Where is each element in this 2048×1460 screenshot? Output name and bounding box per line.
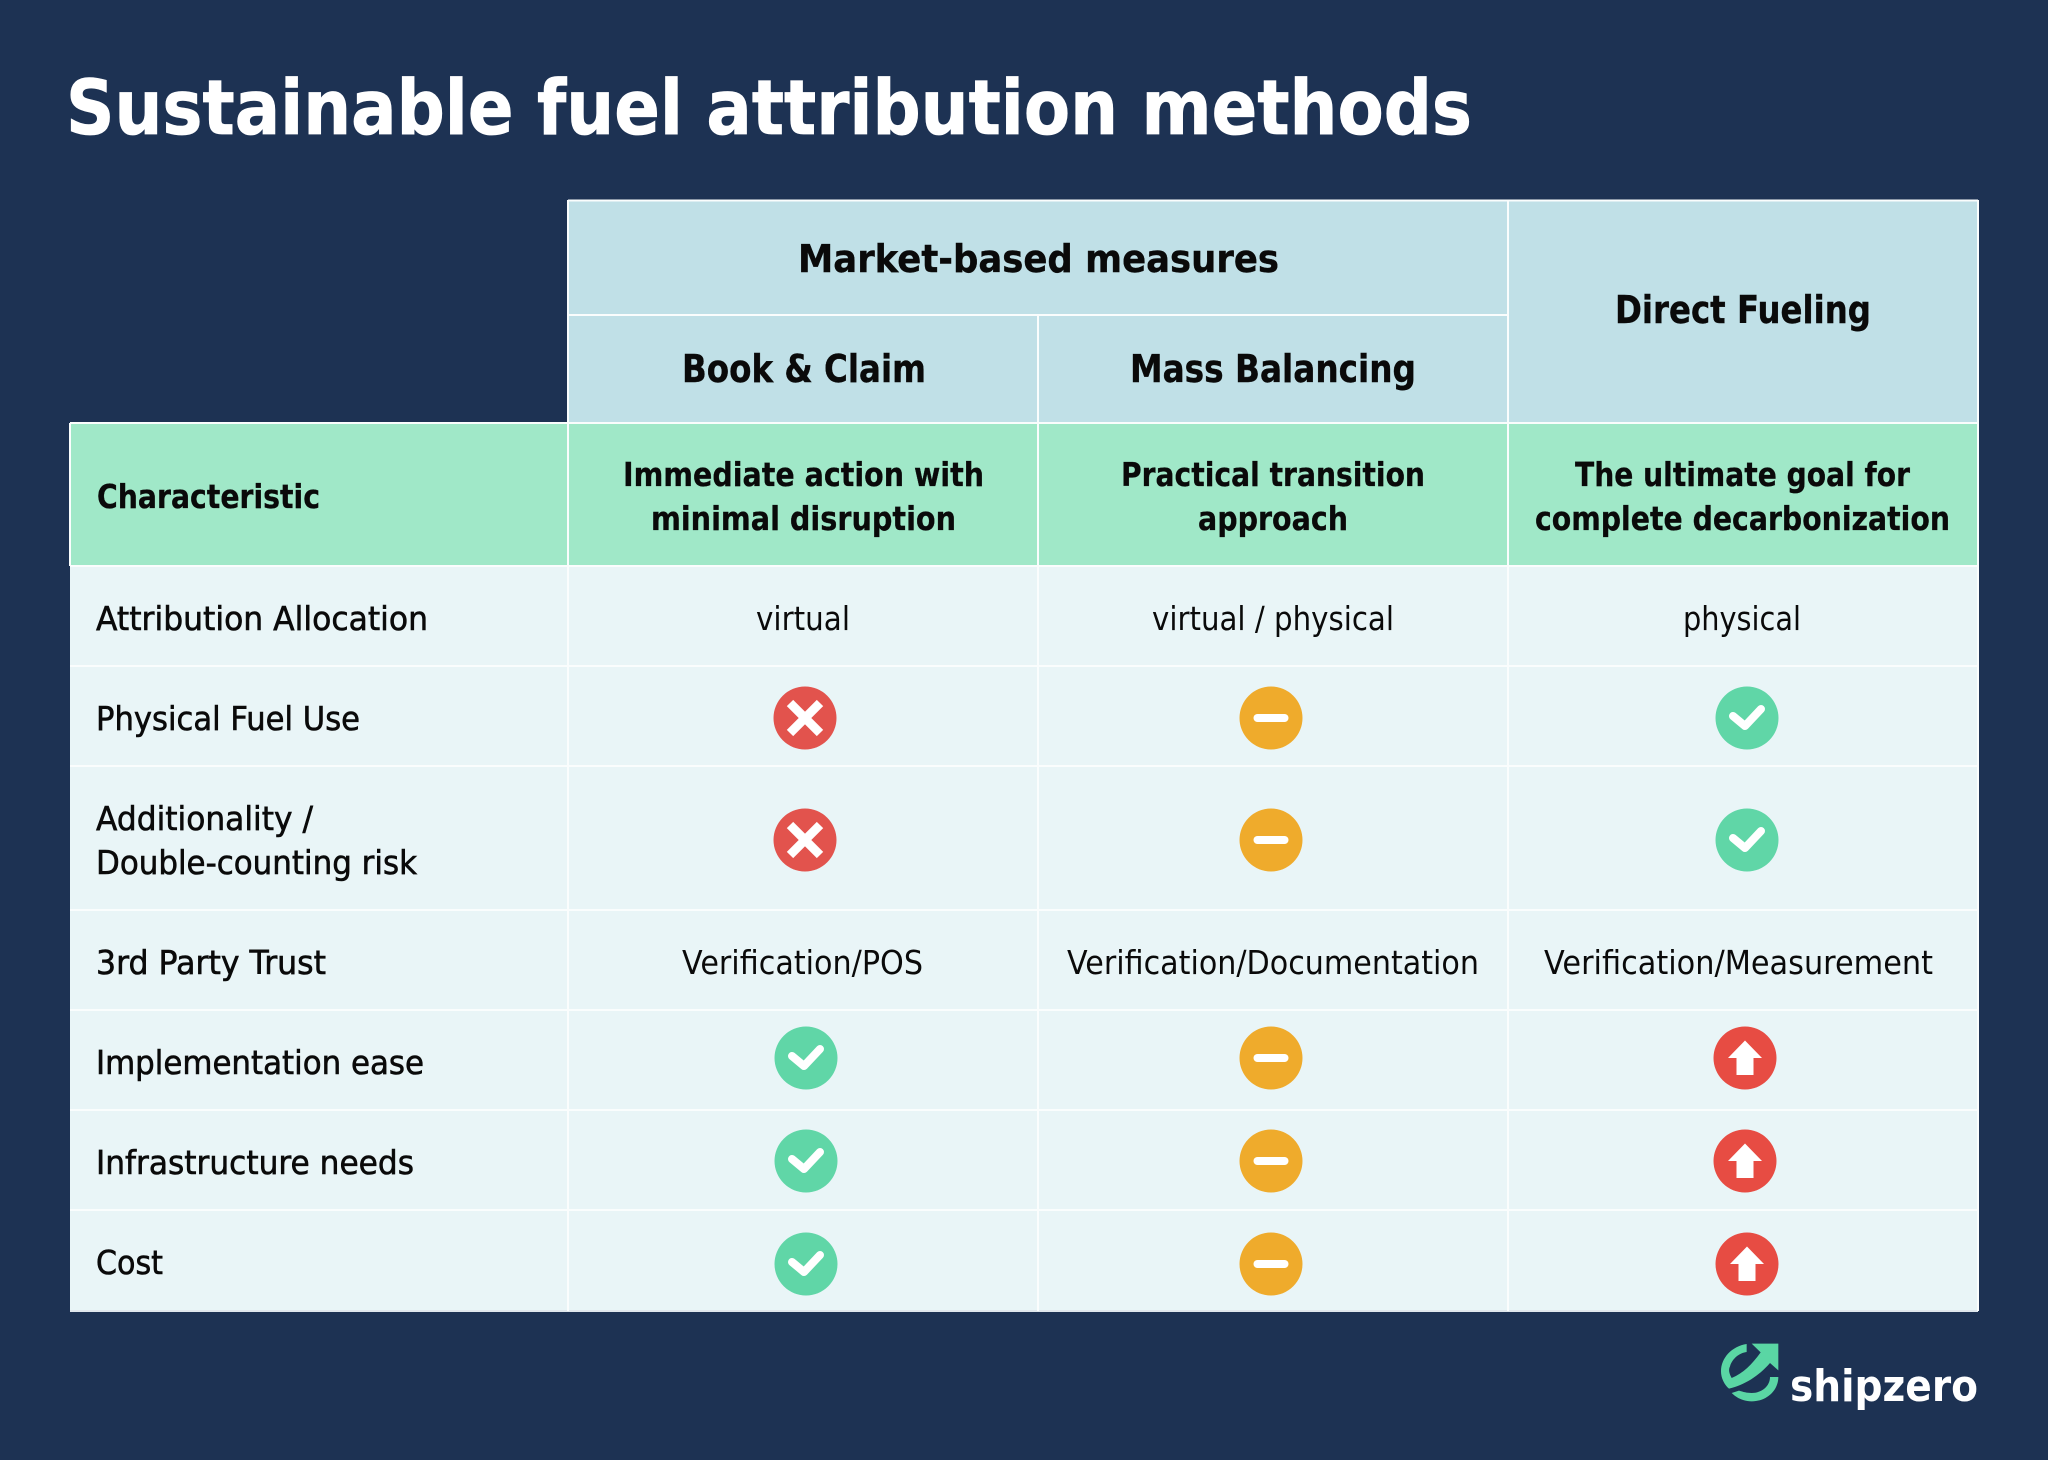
row: 3rd Party Trust: 3rd Party Trust	[96, 944, 326, 982]
text: Direct Fueling summary: The ultimate goal for	[1575, 455, 1911, 494]
row: Infrastructure needs	[96, 1130, 1776, 1192]
panel: characteristic row	[70, 423, 1978, 566]
row: Implementation ease: Implementation ease	[96, 1044, 424, 1082]
row: 3rd Party Trust: Verification/Documentation	[1067, 944, 1479, 982]
text: Mass Balancing summary: approach	[1198, 499, 1348, 538]
row: Additionality / Double-counting risk	[96, 800, 1778, 882]
heading: Market-based measures: Market-based measures	[798, 237, 1279, 282]
heading: Book & Claim: Book & Claim	[682, 347, 926, 392]
row: Attribution Allocation	[96, 600, 1801, 638]
panel: data rows	[70, 566, 1978, 1311]
row: Cost	[96, 1232, 1778, 1296]
row: Attribution Allocation: virtual / physical	[1152, 600, 1394, 638]
row: 3rd Party Trust: Verification/POS	[682, 944, 923, 982]
text: Direct Fueling summary	[1535, 455, 1950, 538]
title: Sustainable fuel attribution methods	[66, 63, 1472, 152]
icon: leaf arrow	[1721, 1344, 1778, 1401]
label: Characteristic: Characteristic	[97, 477, 320, 516]
row: Physical Fuel Use: Physical Fuel Use	[96, 700, 360, 738]
text: Book & Claim summary: Immediate action with	[623, 455, 984, 494]
row: Attribution Allocation: virtual	[756, 600, 850, 638]
row: Infrastructure needs: Infrastructure needs	[96, 1144, 414, 1182]
row: Attribution Allocation: Attribution Allocation	[96, 600, 428, 638]
text: Direct Fueling summary: complete decarbonization	[1535, 499, 1950, 538]
text: Mass Balancing summary	[1121, 455, 1425, 538]
row: Additionality / Double-counting risk: Additionality /	[96, 800, 313, 838]
row: Implementation ease	[96, 1026, 1776, 1090]
heading: Direct Fueling: Direct Fueling	[1615, 288, 1871, 333]
row: Attribution Allocation: physical	[1683, 600, 1801, 638]
row: Additionality / Double-counting risk: Double-counting risk	[96, 844, 417, 882]
row: 3rd Party Trust: Verification/Measurement	[1544, 944, 1933, 982]
row: Physical Fuel Use	[96, 686, 1778, 750]
text: Book & Claim summary	[623, 455, 984, 538]
row: 3rd Party Trust	[96, 944, 1933, 982]
comparison table	[70, 200, 1978, 1311]
heading: Mass Balancing: Mass Balancing	[1130, 347, 1416, 392]
wordmark: shipzero	[1790, 1361, 1978, 1412]
logo: shipzero	[1721, 1344, 1978, 1412]
panel: column headers	[568, 200, 1978, 423]
text: Mass Balancing summary: Practical transition	[1121, 455, 1425, 494]
row: Cost: Cost	[96, 1244, 163, 1282]
text: Book & Claim summary: minimal disruption	[651, 499, 956, 538]
